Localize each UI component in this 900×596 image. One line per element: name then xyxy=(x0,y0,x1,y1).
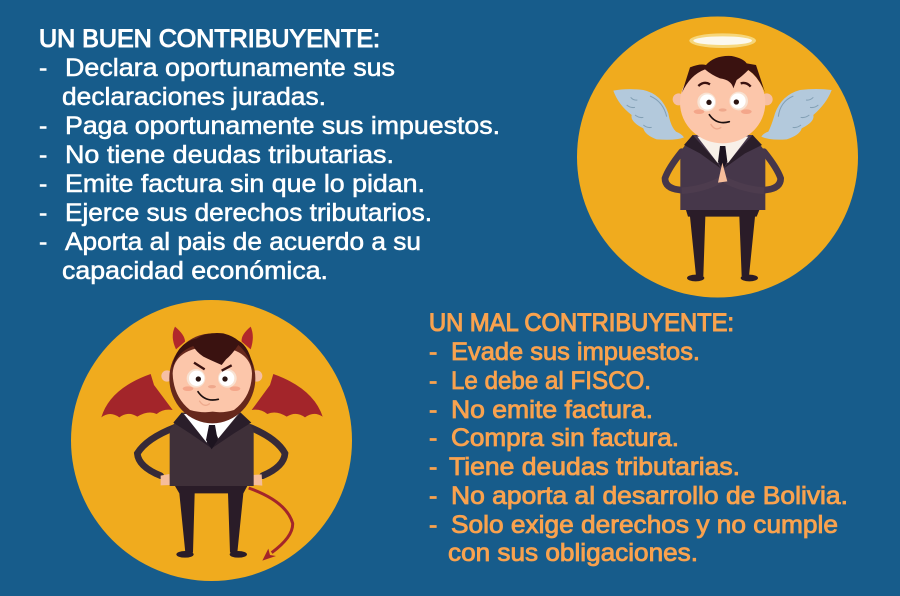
text block: un buen contribuyente: - xyxy=(39,199,47,227)
text block: un buen contribuyente xyxy=(39,25,500,285)
devil horns xyxy=(173,327,253,349)
devil arms xyxy=(137,427,285,476)
text block: un buen contribuyente: No tiene deudas tributarias. xyxy=(65,141,394,169)
text block: un buen contribuyente: Paga oportunamente sus impuestos. xyxy=(65,112,500,140)
angel face xyxy=(694,83,752,129)
angel hair xyxy=(682,56,765,93)
devil beard xyxy=(169,333,255,423)
text block: un buen contribuyente: Declara oportunamente sus xyxy=(65,54,395,82)
heading: un mal contribuyente: UN MAL CONTRIBUYENTE: xyxy=(429,309,734,337)
angel shirt and tie xyxy=(684,135,762,170)
text block: un buen contribuyente: capacidad económica. xyxy=(62,257,328,285)
devil wings xyxy=(101,374,323,417)
text block: un mal contribuyente: - xyxy=(429,338,437,366)
text block: un buen contribuyente: - xyxy=(39,141,47,169)
angel wings xyxy=(613,89,832,140)
devil jacket xyxy=(170,413,254,486)
devil ears xyxy=(161,370,262,382)
text block: un mal contribuyente: - xyxy=(429,453,437,481)
text block: un buen contribuyente: Emite factura sin que lo pidan. xyxy=(65,170,425,198)
text block: un buen contribuyente: - xyxy=(39,54,47,82)
text block: un mal contribuyente: - xyxy=(429,482,437,510)
heading: un buen contribuyente: UN BUEN CONTRIBUYENTE: xyxy=(39,25,380,53)
angel head xyxy=(680,62,765,143)
text block: un mal contribuyente: - xyxy=(429,511,437,539)
icon: angel character in orange circle xyxy=(577,16,858,298)
text block: un mal contribuyente: Solo exige derechos y no cumple xyxy=(451,511,838,539)
text block: un mal contribuyente: No aporta al desarrollo de Bolivia. xyxy=(451,482,848,510)
text block: un mal contribuyente: No emite factura. xyxy=(451,396,653,424)
text block: un mal contribuyente: - xyxy=(429,367,437,395)
devil legs and shoes xyxy=(175,486,247,558)
angel praying hands xyxy=(718,163,727,183)
text block: un mal contribuyente: Tiene deudas tributarias. xyxy=(449,453,740,481)
text block: un buen contribuyente: - xyxy=(39,112,47,140)
devil head xyxy=(173,346,252,412)
icon: devil character in orange circle xyxy=(71,300,352,581)
devil hands xyxy=(161,474,262,486)
angel jacket xyxy=(680,135,765,210)
devil tail xyxy=(249,488,293,561)
text block: un buen contribuyente: Ejerce sus derechos tributarios. xyxy=(65,199,432,227)
text block: un mal contribuyente: Evade sus impuestos. xyxy=(451,338,700,366)
text block: un buen contribuyente: declaraciones juradas. xyxy=(62,83,326,111)
devil hair xyxy=(172,333,253,370)
devil shirt and tie xyxy=(173,413,251,449)
text block: un buen contribuyente: - xyxy=(39,228,47,256)
angel ears xyxy=(673,93,773,105)
text block: un buen contribuyente: Aporta al pais de acuerdo a su xyxy=(65,228,421,256)
angel legs and shoes xyxy=(686,210,759,281)
text block: un mal contribuyente: con sus obligaciones. xyxy=(448,539,698,567)
halo xyxy=(689,33,756,48)
text block: un mal contribuyente: - xyxy=(429,424,437,452)
text block: un mal contribuyente: Compra sin factura. xyxy=(451,424,679,452)
text block: un mal contribuyente: Le debe al FISCO. xyxy=(451,367,651,395)
angel arms xyxy=(665,152,781,190)
text block: un mal contribuyente: - xyxy=(429,396,437,424)
text block: un mal contribuyente xyxy=(429,309,848,567)
devil face xyxy=(183,363,240,405)
text block: un buen contribuyente: - xyxy=(39,170,47,198)
